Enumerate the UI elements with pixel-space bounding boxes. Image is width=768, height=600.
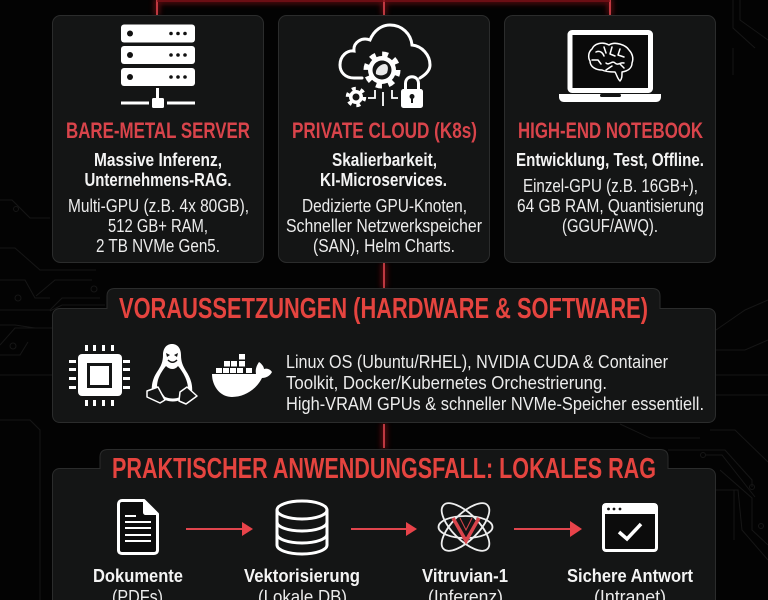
step: vitruvian-1 <box>422 496 508 600</box>
step: dokumente <box>93 500 183 600</box>
icon: atom with V <box>434 496 497 558</box>
panel: private cloud <box>278 16 490 262</box>
text: use case: Unternehmens-RAG. <box>84 170 232 190</box>
text: specs <box>517 175 704 236</box>
icon: database <box>277 501 327 554</box>
icon: cloud with gears and lock <box>340 25 430 108</box>
label: vitruvian-1: Vitruvian-1 <box>422 565 508 586</box>
text: use case: Massive Inferenz, <box>94 150 222 170</box>
text: specs: 2 TB NVMe Gen5. <box>96 235 220 256</box>
text: use case <box>320 150 447 190</box>
arrow: dokumente to vektorisierung <box>186 522 253 536</box>
icon: processor chip <box>69 345 130 406</box>
text: use case <box>84 150 232 190</box>
text: specs: 64 GB RAM, Quantisierung <box>517 195 704 216</box>
icon: laptop with brain <box>559 32 661 102</box>
label: sichere antwort: Sichere Antwort <box>567 565 693 586</box>
icon: linux penguin <box>147 344 197 404</box>
panel: praktischer anwendungsfall <box>52 450 716 600</box>
text: specs: Multi-GPU (z.B. 4x 80GB), <box>68 195 249 216</box>
text: specs: Einzel-GPU (z.B. 16GB+), <box>523 175 698 196</box>
heading: high-end notebook: HIGH-END NOTEBOOK <box>518 118 703 143</box>
panel: high-end notebook <box>504 16 716 262</box>
arrow: vitruvian to antwort <box>514 521 582 537</box>
text: requirements: Toolkit, Docker/Kubernetes Orchestrierung. <box>286 372 607 393</box>
icon: docker whale <box>212 354 272 397</box>
text: specs <box>286 195 482 256</box>
text: requirements <box>286 351 704 414</box>
connector lines <box>157 0 610 449</box>
text: use case: Skalierbarkeit, <box>332 150 437 170</box>
text: specs: Dedizierte GPU-Knoten, <box>302 195 467 216</box>
label: dokumente: Dokumente <box>93 565 183 586</box>
text: specs: (SAN), Helm Charts. <box>313 235 455 256</box>
text: requirements: High-VRAM GPUs & schneller NVMe-Speicher essentiell. <box>286 393 704 414</box>
heading: bare-metal server: BARE-METAL SERVER <box>66 118 250 143</box>
icon: server rack <box>121 24 195 108</box>
text: use case: Entwicklung, Test, Offline. <box>516 150 704 170</box>
icon: document <box>118 500 158 554</box>
arrow: vektorisierung to vitruvian <box>351 522 417 536</box>
label: vektorisierung: Vektorisierung <box>244 565 360 586</box>
text: use case: KI-Microservices. <box>320 170 447 190</box>
text: specs: 512 GB+ RAM, <box>108 215 208 236</box>
step: sichere antwort <box>567 504 693 600</box>
text: specs: (GGUF/AWQ). <box>562 215 658 236</box>
panel: voraussetzungen <box>52 288 716 422</box>
icon: browser window with check <box>603 504 657 550</box>
heading: private cloud: PRIVATE CLOUD (K8s) <box>292 118 477 143</box>
panel: bare-metal server <box>52 16 264 262</box>
step: vektorisierung <box>244 501 360 600</box>
text: specs: Schneller Netzwerkspeicher <box>286 215 482 236</box>
text: specs <box>68 195 249 256</box>
text: requirements: Linux OS (Ubuntu/RHEL), NVIDIA CUDA & Container <box>286 351 668 372</box>
